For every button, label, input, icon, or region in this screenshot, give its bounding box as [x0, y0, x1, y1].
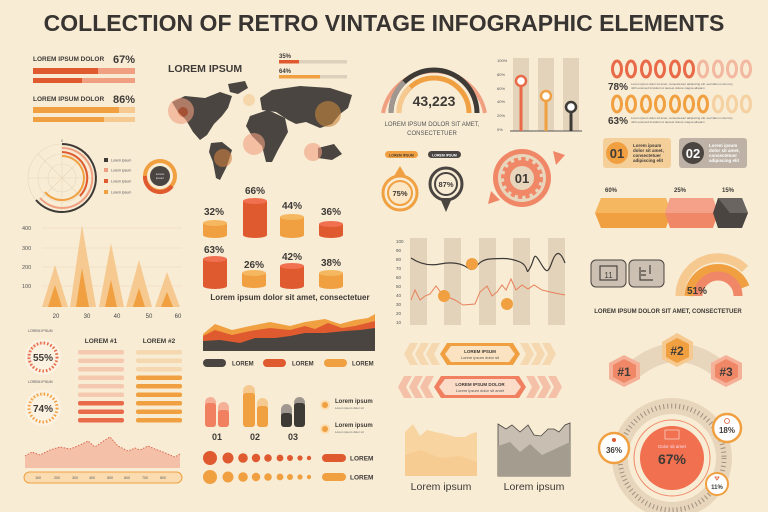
boxes 01 02: consectetuer — [709, 153, 737, 158]
world map — [168, 81, 352, 180]
legend: stacked area — [203, 359, 374, 368]
hexagon ranking #1 #2 #3: #3 — [719, 365, 733, 379]
cylinder chart: 32% — [204, 207, 224, 218]
dotted donuts 55% 74%: LOREM IPSUM — [28, 329, 53, 333]
legend: stacked area: LOREM — [232, 362, 254, 368]
panel: progress bars top-left: 67% — [113, 54, 135, 66]
line chart with columns: 40 — [396, 293, 402, 298]
spike area chart: 20 — [53, 314, 60, 320]
ring rows — [608, 61, 750, 127]
big circle 67% with badges: 36% — [606, 446, 622, 455]
polar chart — [28, 139, 96, 212]
rainbow arc 51%: LOREM IPSUM DOLOR SIT AMET, CONSECTETUER — [594, 309, 742, 315]
cylinder chart: 42% — [282, 252, 302, 263]
wavy area with axis: 500 — [107, 476, 113, 480]
rainbow arc 51% — [594, 258, 745, 315]
panel: progress bars top-left: LOREM IPSUM DOLOR — [33, 56, 104, 63]
icons calendar and document: 11 — [604, 271, 613, 280]
line chart with columns: 30 — [396, 302, 402, 307]
bar list LOREM #1 #2: LOREM #2 — [143, 338, 176, 345]
legend: polar chart: Lorem ipsum — [111, 168, 131, 172]
donut chart small: Lorem — [156, 172, 165, 176]
bar list LOREM #1 #2: LOREM #1 — [85, 338, 118, 345]
spike area chart: 50 — [146, 314, 153, 320]
chevron banner 2: LOREM IPSUM DOLOR — [455, 382, 505, 387]
panel: progress bars top-left: 86% — [113, 94, 135, 106]
chevron banner 2 — [398, 376, 562, 398]
title: COLLECTION OF RETRO VINTAGE INFOGRAPHIC ELEMENTS — [44, 10, 724, 36]
boxes 01 02: 01 — [610, 146, 624, 161]
semicircle gauge: CONSECTETUER — [407, 131, 458, 137]
boxes 01 02: Lorem ipsum — [633, 143, 661, 148]
rounded bar chart 01 02 03: 02 — [250, 432, 260, 442]
hexagon ranking #1 #2 #3: #2 — [670, 344, 684, 358]
dot size rows — [203, 451, 373, 484]
line chart with columns: 70 — [396, 266, 402, 271]
ring rows: nibh euismod tincidunt ut laoreet dolore magna aliquam — [631, 120, 705, 124]
gear icon 01: 01 — [515, 171, 529, 186]
dotted donuts 55% 74%: 74% — [33, 404, 53, 415]
pin labels and pins: LOREM IPSUM — [432, 154, 457, 158]
boxes 01 02: dolor sit amet, — [633, 148, 664, 153]
line chart with columns: 10 — [396, 320, 402, 325]
pin labels and pins: 87% — [438, 180, 454, 189]
panel: progress bars top-left: LOREM IPSUM DOLOR — [33, 96, 104, 103]
spike area chart: 200 — [22, 265, 31, 271]
cylinder chart: Lorem ipsum dolor sit amet, consectetuer — [210, 293, 370, 302]
legend: bar chart: Lorem ipsum dolor sit — [335, 406, 364, 410]
rainbow arc 51%: 51% — [687, 286, 707, 297]
ring rows: 78% — [608, 82, 628, 93]
boxes 01 02: 02 — [686, 146, 700, 161]
cylinder chart: 38% — [321, 258, 341, 269]
boxes 01 02: dolor sit amet, — [709, 148, 740, 153]
big circle 67% with badges: Dolor sit amet — [658, 444, 687, 449]
cylinder chart: 63% — [204, 245, 224, 256]
chevron banner 1: LOREM IPSUM — [464, 349, 496, 354]
spike area chart: 40 — [114, 314, 121, 320]
ring rows: Lorem ipsum dolor sit amet, consectetuer adipiscing elit, sed diam nonummy — [631, 116, 733, 120]
cylinder chart: 44% — [282, 201, 302, 212]
lollipop chart: 20% — [497, 113, 505, 118]
cylinder chart: 36% — [321, 207, 341, 218]
cylinder chart: 66% — [245, 186, 265, 197]
boxes 01 02: adipiscing elit — [709, 158, 740, 163]
gear icon 01 — [488, 149, 565, 207]
rounded bar chart 01 02 03: 01 — [212, 432, 222, 442]
lollipop chart — [497, 58, 582, 132]
lollipop chart: 40% — [497, 99, 505, 104]
ring rows: Lorem ipsum dolor sit amet, consectetuer adipiscing elit, sed diam nonummy — [631, 82, 733, 86]
rounded bar chart 01 02 03: 03 — [288, 432, 298, 442]
semicircle gauge — [383, 70, 485, 137]
chevron banner 1: Lorem ipsum dolor sit — [461, 355, 500, 360]
mini bars by map: 35% — [279, 54, 292, 60]
lollipop chart: 100% — [497, 58, 508, 63]
legend: polar chart — [104, 158, 131, 194]
legend: bar chart: Lorem ipsum dolor sit — [335, 430, 364, 434]
big circle 67% with badges: 18% — [719, 426, 735, 435]
boxes 01 02: adipiscing elit — [633, 158, 664, 163]
map heading: LOREM IPSUM — [168, 63, 242, 75]
legend: bar chart: Lorem ipsum — [335, 423, 373, 429]
big circle 67% with badges: 67% — [658, 451, 687, 467]
wavy area with axis: 300 — [72, 476, 78, 480]
dotted donuts 55% 74% — [25, 329, 61, 426]
legend: stacked area: LOREM — [352, 362, 374, 368]
cylinder chart — [203, 186, 370, 302]
boxes 01 02: consectetuer — [633, 153, 661, 158]
pin labels and pins: 75% — [392, 189, 408, 198]
line chart with columns: 20 — [396, 311, 402, 316]
wavy area with axis: 600 — [124, 476, 130, 480]
line chart with columns — [396, 238, 565, 325]
dotted donuts 55% 74%: 55% — [33, 353, 53, 364]
boxes 01 02: Lorem ipsum — [709, 143, 737, 148]
icons calendar and document — [591, 260, 664, 287]
spike area chart: 300 — [22, 246, 31, 252]
big circle 67% with badges: 11% — [711, 485, 723, 491]
line chart with columns: 50 — [396, 284, 402, 289]
rounded bar chart 01 02 03 — [205, 385, 305, 442]
bar list LOREM #1 #2 — [78, 338, 182, 422]
legend: polar chart: Lorem ipsum — [111, 190, 131, 194]
legend: polar chart: Lorem ipsum — [111, 180, 131, 184]
semicircle gauge: 43,223 — [413, 93, 456, 109]
spike area chart: 30 — [84, 314, 91, 320]
spike area chart: 100 — [22, 284, 31, 290]
dot size rows: LOREM — [350, 474, 373, 482]
wavy area with axis: 700 — [142, 476, 148, 480]
stacked area chart — [203, 314, 375, 351]
3D hex bar: 15% — [722, 188, 735, 194]
ring rows: 63% — [608, 116, 628, 127]
area chart orange — [405, 424, 477, 493]
3D hex bar — [595, 188, 748, 228]
dotted donuts 55% 74%: LOREM IPSUM — [28, 380, 53, 384]
lollipop chart: 0% — [497, 127, 503, 132]
big circle 67% with badges — [599, 398, 741, 512]
wavy area with axis: 800 — [160, 476, 166, 480]
pin labels and pins: LOREM IPSUM — [389, 154, 414, 158]
wavy area with axis: 200 — [54, 476, 60, 480]
line chart with columns: 80 — [396, 257, 402, 262]
wavy area with axis: 400 — [89, 476, 95, 480]
area chart grey: Lorem ipsum — [504, 481, 565, 493]
chevron banner 1 — [404, 343, 556, 365]
wavy area with axis — [24, 437, 182, 483]
donut chart small: ipsum — [156, 176, 164, 180]
mini bars by map — [279, 54, 347, 78]
legend: stacked area: LOREM — [292, 362, 314, 368]
boxes 01 02 — [603, 138, 747, 168]
polar chart: 0 — [61, 139, 63, 143]
cylinder chart: 26% — [244, 260, 264, 271]
donut chart small — [145, 161, 175, 192]
mini bars by map: 64% — [279, 69, 292, 75]
lollipop chart: 80% — [497, 72, 505, 77]
legend: bar chart: Lorem ipsum — [335, 399, 373, 405]
legend: bar chart — [320, 399, 373, 434]
area chart grey — [498, 423, 570, 493]
spike area chart: 400 — [22, 226, 31, 232]
chevron banner 2: Lorem ipsum dolor sit amet — [456, 388, 505, 393]
wavy area with axis: 100 — [35, 476, 41, 480]
legend: polar chart: Lorem ipsum — [111, 158, 131, 162]
panel: progress bars top-left — [33, 54, 135, 122]
line chart with columns: 60 — [396, 275, 402, 280]
line chart with columns: 90 — [396, 248, 402, 253]
spike area chart — [22, 225, 182, 320]
hexagon ranking #1 #2 #3: #1 — [617, 365, 631, 379]
lollipop chart: 60% — [497, 86, 505, 91]
hexagon ranking #1 #2 #3 — [609, 333, 742, 387]
ring rows: nibh euismod tincidunt ut laoreet dolore magna aliquam — [631, 86, 705, 90]
line chart with columns: 100 — [396, 239, 404, 244]
area chart orange: Lorem ipsum — [411, 481, 472, 493]
semicircle gauge: LOREM IPSUM DOLOR SIT AMET, — [385, 122, 480, 128]
3D hex bar: 25% — [674, 188, 687, 194]
dot size rows: LOREM — [350, 456, 373, 462]
pin labels and pins — [383, 151, 462, 212]
spike area chart: 60 — [175, 314, 182, 320]
3D hex bar: 60% — [605, 188, 618, 194]
